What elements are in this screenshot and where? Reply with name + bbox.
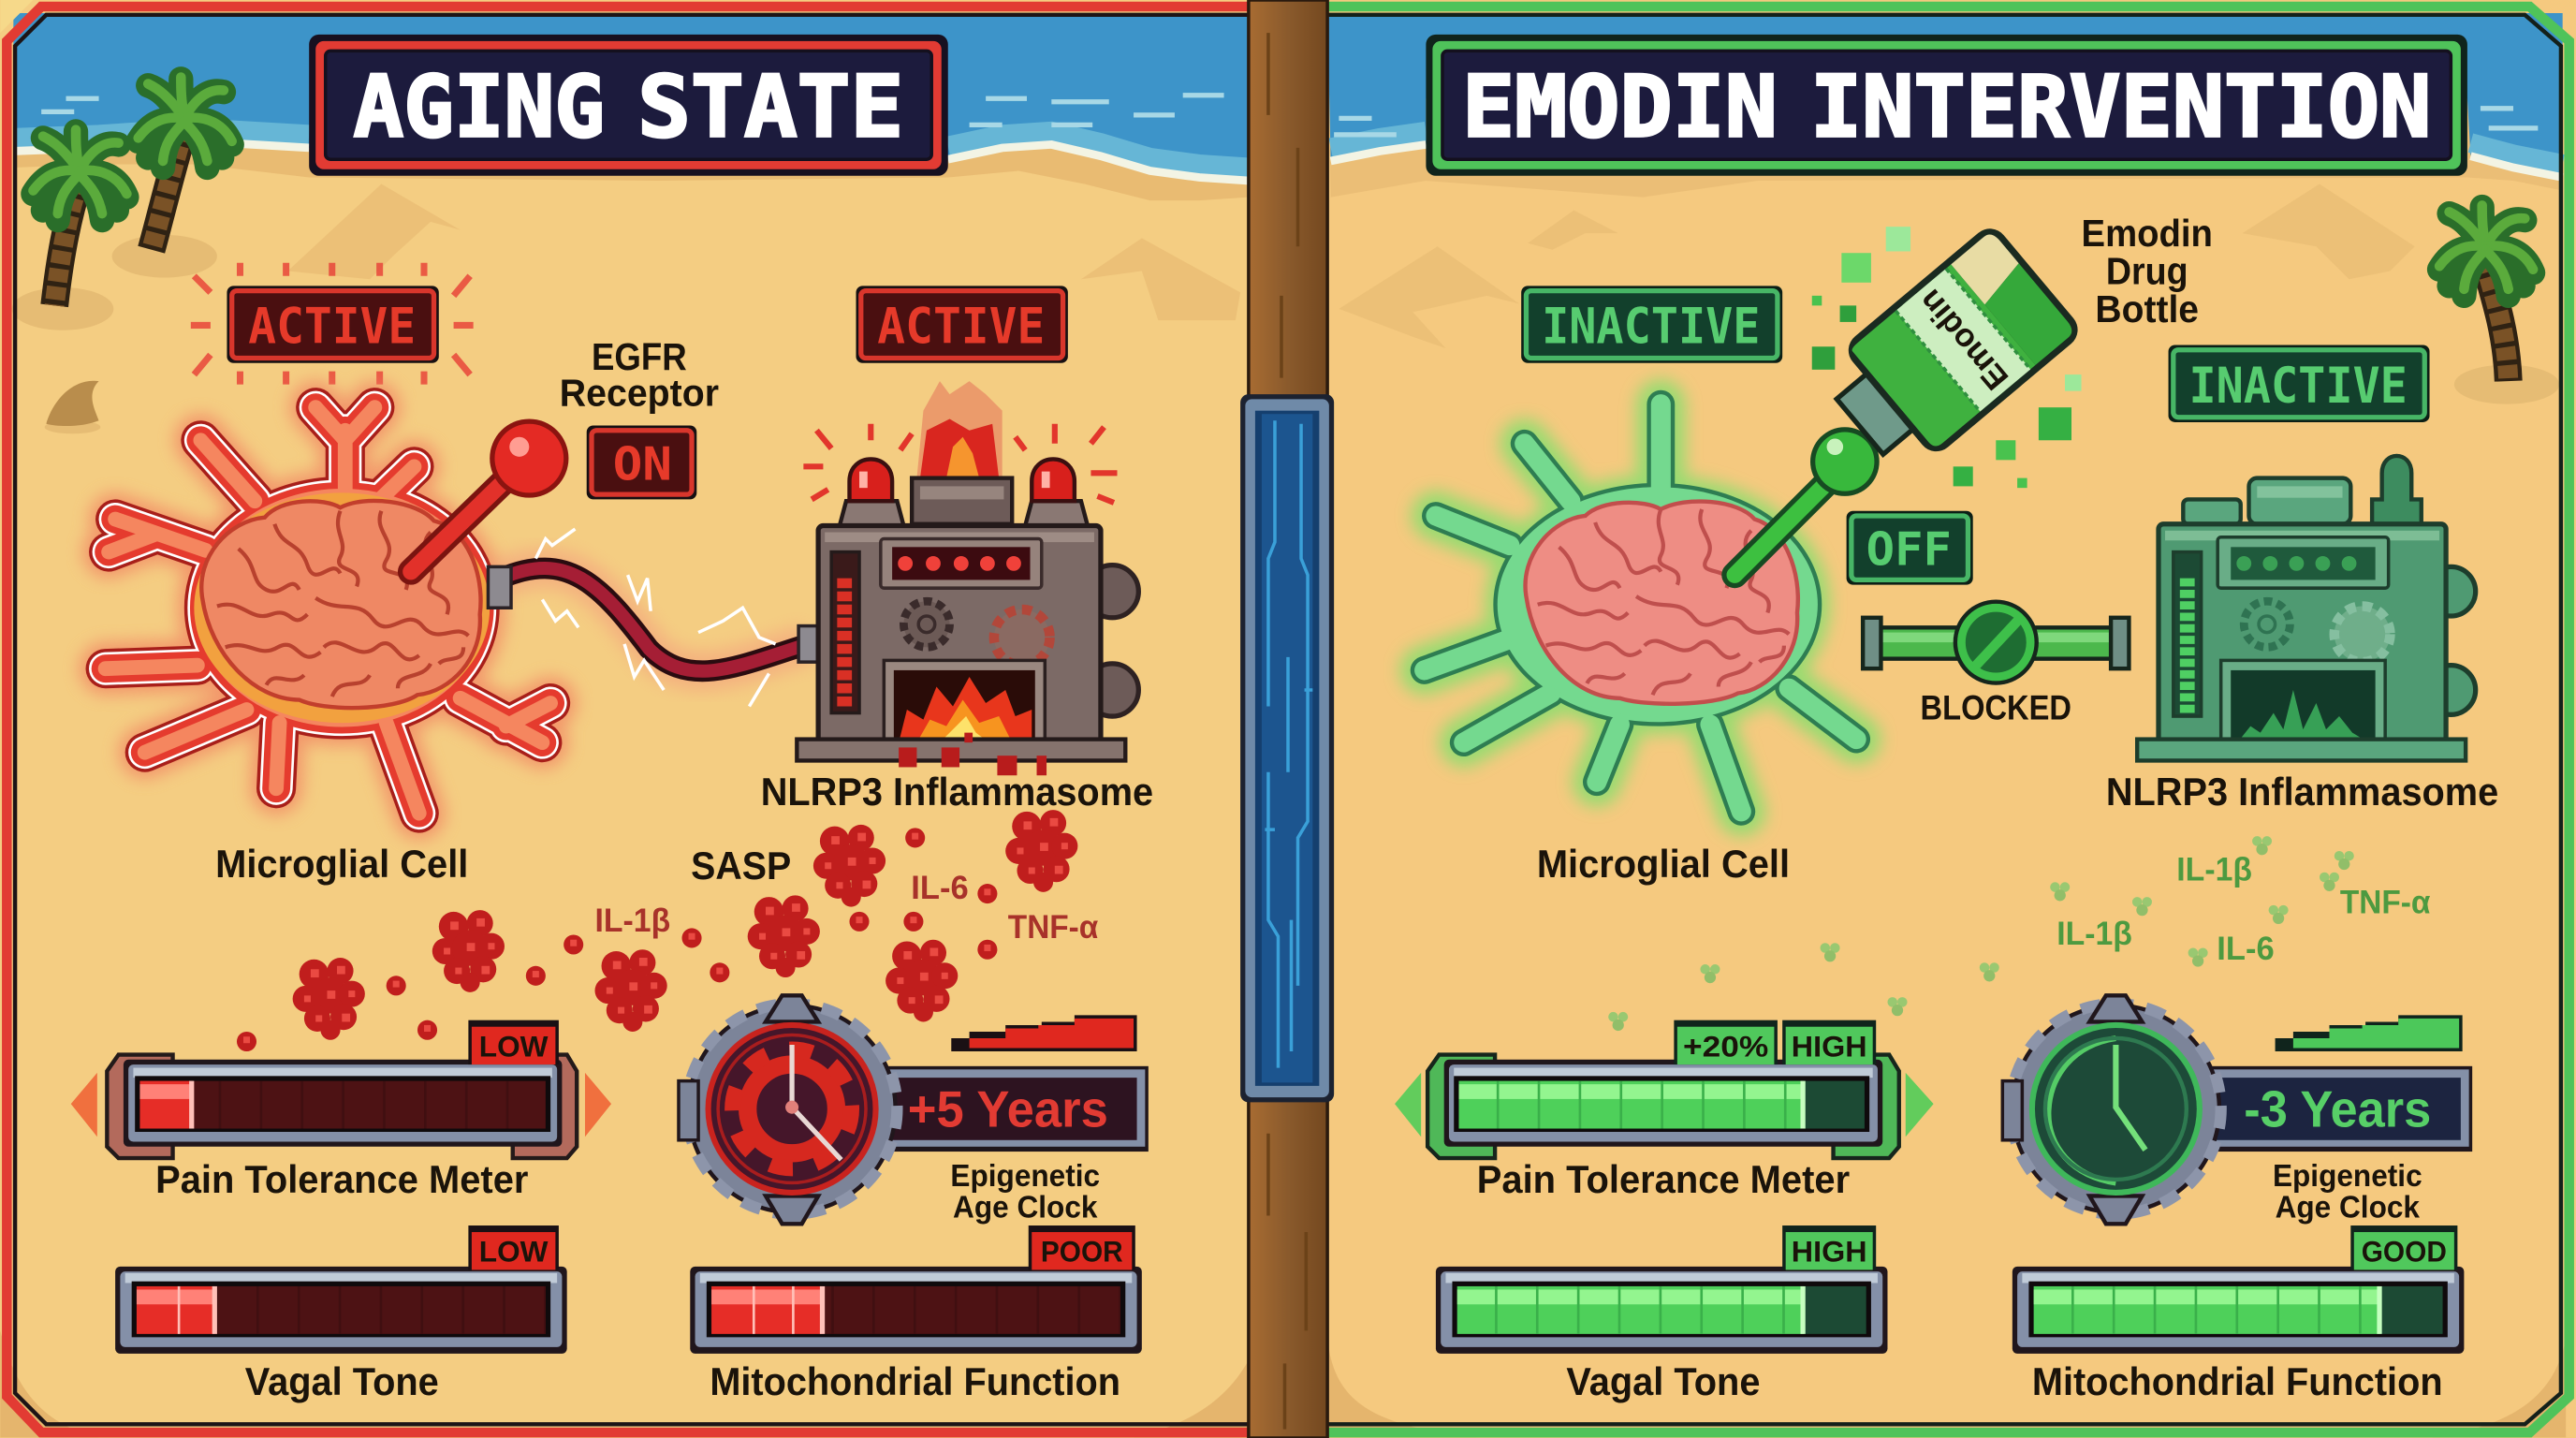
clock: epigenetic age plus xyxy=(679,995,897,1224)
label: epigenetic age clock intervention: Epigenetic xyxy=(2273,1159,2422,1194)
icon: furnace flames xyxy=(899,677,1032,742)
cytokine labels: aging: IL-6 xyxy=(911,870,969,906)
icon: left palm tree far xyxy=(112,77,232,278)
tag: poor: POOR xyxy=(1041,1235,1123,1269)
status badge: cell inactive xyxy=(1521,286,1782,363)
icon: blocked pipe xyxy=(1863,599,2129,685)
cytokine labels: aging: IL-1β xyxy=(595,902,670,939)
title: emodin intervention xyxy=(1426,35,2467,176)
machine: NLRP3 inflammasome inactive xyxy=(2137,456,2476,760)
drug particles xyxy=(1812,227,2082,488)
label: pain tolerance meter aging: Pain Tolerance Meter xyxy=(155,1157,528,1201)
readout panel: plus five years: +5 Years xyxy=(908,1081,1108,1138)
cytokine labels: intervention: TNF-α xyxy=(2340,885,2431,921)
status badge: ON: ON xyxy=(613,436,672,491)
panel frame: aging state xyxy=(0,0,1249,1432)
label: NLRP3 inflammasome: NLRP3 Inflammasome xyxy=(761,770,1153,814)
meter: mitochondrial function aging xyxy=(690,1225,1142,1354)
meter: pain tolerance aging xyxy=(71,1020,611,1158)
icon: dormant furnace flames xyxy=(2237,690,2369,742)
cytokine labels: aging xyxy=(595,870,1099,946)
title: emodin intervention: EMODIN xyxy=(1462,57,1778,157)
label: NLRP3 inflammasome intervention: NLRP3 Inflammasome xyxy=(2106,770,2498,814)
wooden divider post xyxy=(1249,0,1327,1438)
tag: low: LOW xyxy=(479,1235,549,1269)
icon: rising bars aging xyxy=(951,1015,1137,1051)
SASP cytokine clusters xyxy=(237,810,1077,1051)
status badge: cell inactive: INACTIVE xyxy=(1542,299,1760,356)
status badge: ON xyxy=(587,425,696,499)
title: emodin intervention: INTERVENTION xyxy=(1810,57,2431,157)
tag: plus twenty percent xyxy=(1674,1020,1778,1064)
status badge: inflammasome inactive: INACTIVE xyxy=(2188,358,2408,415)
meter: vagal tone aging xyxy=(115,1225,567,1354)
panel: emodin intervention background xyxy=(1325,0,2576,1438)
icon: sand shell xyxy=(45,381,100,433)
readout panel: plus five years xyxy=(881,1066,1149,1152)
status badge: OFF: OFF xyxy=(1866,522,1952,577)
meter: mitochondrial function intervention xyxy=(2012,1225,2464,1354)
central circuit panel xyxy=(1240,394,1334,1102)
label: emodin drug bottle xyxy=(2082,212,2213,330)
panel frame: emodin intervention xyxy=(1327,7,2569,1432)
icon: emodin dropper xyxy=(1734,427,1880,575)
meter: vagal tone intervention xyxy=(1436,1225,1887,1354)
icon: emodin drug bottle xyxy=(1813,221,2085,482)
title: aging state: AGING xyxy=(354,57,605,157)
tag: plus twenty percent: +20% xyxy=(1683,1029,1768,1063)
label: microglial cell intervention: Microglial Cell xyxy=(1537,842,1790,886)
label: pain tolerance meter intervention: Pain Tolerance Meter xyxy=(1477,1157,1850,1201)
label: epigenetic age clock aging xyxy=(950,1159,1100,1225)
label: epigenetic age clock intervention: Age Clock xyxy=(2276,1190,2420,1225)
clock: epigenetic age minus xyxy=(2002,995,2221,1224)
cytokine labels: intervention: IL-1β xyxy=(2056,916,2132,952)
cytokine labels: intervention: IL-6 xyxy=(2217,931,2275,967)
tag: low xyxy=(468,1020,559,1064)
icon: EGFR lever on xyxy=(411,418,568,572)
status badge: inflammasome active: ACTIVE xyxy=(877,299,1045,356)
label: epigenetic age clock aging: Age Clock xyxy=(953,1190,1098,1225)
label: mitochondrial function intervention: Mitochondrial Function xyxy=(2032,1359,2443,1403)
panel: aging state background xyxy=(0,0,1251,1438)
title: aging state: STATE xyxy=(637,57,903,157)
tag: high xyxy=(1782,1020,1876,1064)
cytokine labels: intervention: IL-1β xyxy=(2176,852,2252,888)
label: epigenetic age clock intervention xyxy=(2273,1159,2422,1225)
label: emodin drug bottle: Emodin xyxy=(2082,212,2213,255)
label: mitochondrial function aging: Mitochondrial Function xyxy=(710,1359,1120,1403)
microglial cell: inactive xyxy=(1425,404,1856,812)
label: blocked: BLOCKED xyxy=(1921,689,2071,727)
label: vagal tone intervention: Vagal Tone xyxy=(1566,1359,1760,1403)
label: EGFR receptor xyxy=(560,335,719,414)
readout panel: minus three years xyxy=(2202,1066,2472,1152)
machine: NLRP3 inflammasome active xyxy=(797,381,1138,775)
tag: low xyxy=(468,1225,559,1269)
tag: high xyxy=(1782,1225,1876,1269)
icon: rising bars intervention xyxy=(2276,1015,2463,1051)
label: microglial cell: Microglial Cell xyxy=(215,842,468,886)
status badge: OFF xyxy=(1847,511,1973,585)
microglial cell: active xyxy=(106,407,550,814)
label: emodin drug bottle: Bottle xyxy=(2095,287,2199,330)
status badge: cell active xyxy=(191,263,474,385)
icon: right palm tree xyxy=(2439,205,2559,404)
status badge: cell active: ACTIVE xyxy=(248,299,416,356)
tag: poor xyxy=(1029,1225,1135,1269)
icon: rooftop fire xyxy=(916,381,1003,478)
cytokine labels: aging: TNF-α xyxy=(1008,909,1099,946)
label: epigenetic age clock aging: Epigenetic xyxy=(950,1159,1100,1194)
tag: high: HIGH xyxy=(1792,1029,1867,1063)
status badge: inflammasome active xyxy=(856,286,1068,363)
signal wire with sparks xyxy=(488,529,818,707)
label: EGFR receptor: Receptor xyxy=(560,371,719,414)
meter: pain tolerance intervention xyxy=(1395,1020,1934,1158)
tag: low: LOW xyxy=(479,1029,549,1063)
cytokine labels: intervention xyxy=(2056,852,2431,967)
brain: active cell xyxy=(201,501,481,708)
label: vagal tone aging: Vagal Tone xyxy=(245,1359,439,1403)
tag: high: HIGH xyxy=(1792,1235,1867,1269)
label: emodin drug bottle: Drug xyxy=(2106,250,2188,293)
label: SASP: SASP xyxy=(691,844,791,888)
tag: good: GOOD xyxy=(2362,1235,2447,1269)
label: EGFR receptor: EGFR xyxy=(592,335,687,378)
status badge: inflammasome inactive xyxy=(2169,345,2430,422)
brain: inactive cell xyxy=(1526,502,1798,704)
readout panel: minus three years: -3 Years xyxy=(2244,1081,2431,1138)
icon: emodin drug bottle: Emodin xyxy=(1911,283,2015,397)
tag: good xyxy=(2350,1225,2457,1269)
icon: left palm tree near xyxy=(12,130,126,330)
title: aging state xyxy=(309,35,948,176)
faded cytokine particles xyxy=(1608,836,2354,1031)
